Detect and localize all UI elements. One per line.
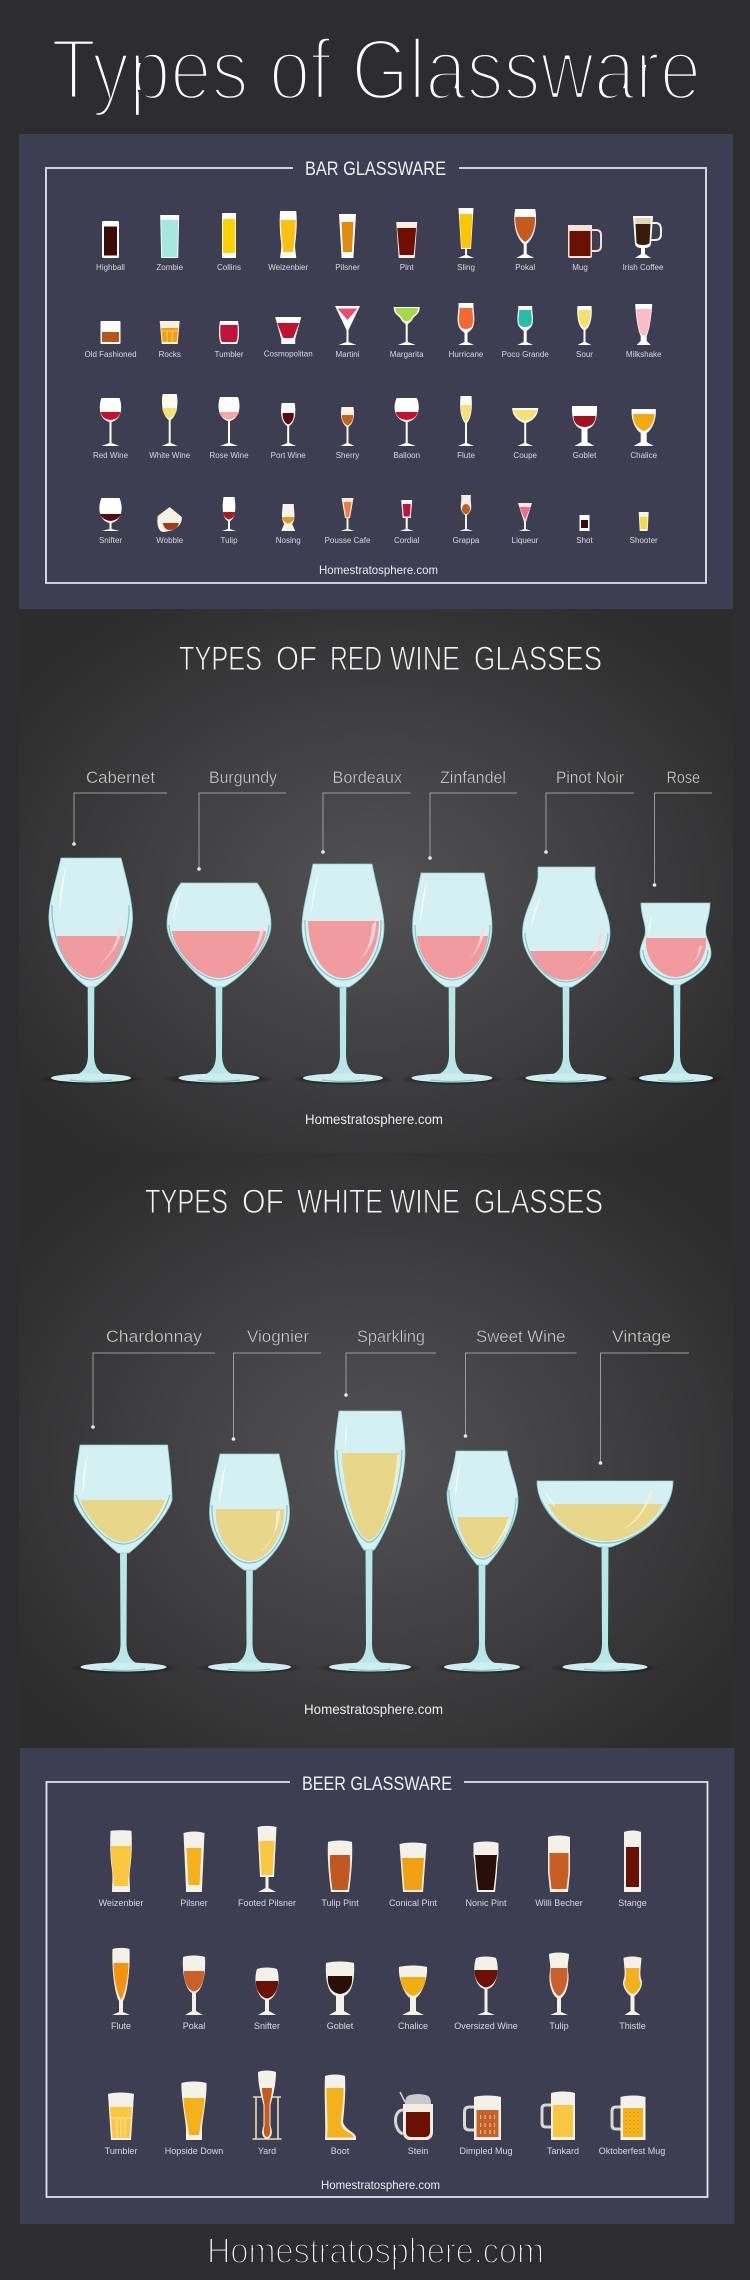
beer: Boot [325, 2074, 356, 2156]
beer: Willi Becher [535, 1836, 583, 1908]
callout: Viognier [232, 1327, 321, 1441]
glass: Port Wine [271, 403, 306, 460]
glass: Mug: Mug [572, 263, 588, 272]
wine glass: Burgundy [163, 883, 275, 1085]
wine glass: Bordeaux [291, 864, 395, 1085]
wine glass: Chardonnay [68, 1445, 180, 1674]
glass: Margarita [390, 307, 424, 359]
callout: Sparkling [344, 1327, 436, 1397]
beer: Stein: Stein [408, 2146, 428, 2156]
glass: Chalice [630, 409, 658, 460]
glass: White Wine: White Wine [149, 451, 191, 460]
panel: red wine glasses [19, 609, 733, 1153]
glass: Rocks: Rocks [159, 350, 181, 359]
heading: types of white wine glasses: TYPES [145, 1183, 228, 1221]
glass: Coupe [512, 408, 538, 460]
wine glass: Sweet Wine [432, 1451, 532, 1674]
glass: Rose Wine [209, 397, 249, 460]
heading: types of red wine glasses: GLASSES [474, 640, 602, 678]
beer: Conical Pint: Conical Pint [389, 1898, 438, 1908]
callout: Zinfandel [428, 768, 517, 860]
glass: Nosing [276, 504, 301, 545]
callout: Burgundy [197, 768, 286, 871]
beer: Dimpled Mug [459, 2096, 513, 2156]
footer site name: Homestratosphere.com [207, 2230, 544, 2271]
callout: Cabernet [72, 768, 167, 846]
glass: Milkshake [626, 304, 662, 359]
beer: Weizenbier [99, 1830, 143, 1908]
glass: Old Fashioned: Old Fashioned [84, 350, 137, 359]
beer: Conical Pint [389, 1842, 438, 1908]
beer: Pilsner: Pilsner [180, 1898, 208, 1908]
heading: types of red wine glasses: TYPES [179, 640, 262, 678]
source credit: beer: Homestratosphere.com [321, 2178, 440, 2192]
callout: Cabernet: Cabernet [86, 768, 155, 787]
callout: Zinfandel: Zinfandel [440, 768, 506, 787]
glass: Sling: Sling [457, 263, 475, 272]
glass: Goblet [572, 406, 597, 460]
beer: Tulip [549, 1952, 569, 2031]
beer: Tankard: Tankard [547, 2146, 579, 2156]
beer: Chalice [398, 1966, 428, 2031]
glass: Shot [576, 515, 594, 545]
beer: Nonic Pint: Nonic Pint [465, 1898, 507, 1908]
beer: Yard: Yard [258, 2146, 276, 2156]
source credit: red wine: Homestratosphere.com [305, 1111, 443, 1127]
wine glass: Vintage [537, 1481, 673, 1674]
wine glass: Cabernet [39, 858, 143, 1085]
wine glass: Rose [626, 903, 726, 1085]
glass: Pousse Cafe: Pousse Cafe [325, 536, 371, 545]
source credit: bar: Homestratosphere.com [319, 563, 438, 577]
glass: Cosmopolitan [264, 317, 313, 358]
beer: Oversized Wine [454, 1956, 518, 2031]
beer: Tulip Pint [321, 1840, 359, 1908]
glass: Pokal: Pokal [515, 263, 535, 272]
glass: Tumbler (bar) [214, 321, 244, 359]
callout: Bordeaux [321, 768, 410, 854]
callout: Vintage: Vintage [612, 1327, 671, 1346]
callout: Pinot Noir: Pinot Noir [556, 768, 624, 787]
glass: Pousse Cafe [325, 498, 371, 545]
glass: Flute: Flute [457, 451, 475, 460]
beer: Yard [252, 2070, 282, 2156]
beer: Tulip Pint: Tulip Pint [321, 1898, 359, 1908]
heading: types of red wine glasses: WINE [390, 640, 460, 678]
callout: Burgundy: Burgundy [209, 768, 277, 787]
glass: Pilsner: Pilsner [335, 263, 360, 272]
beer: Tumbler [105, 2092, 137, 2156]
glass: Highball [96, 221, 125, 272]
callout: Rose: Rose [666, 768, 700, 787]
glass: Rocks [159, 321, 181, 359]
beer: Tulip: Tulip [549, 2021, 569, 2031]
glass: Shooter: Shooter [630, 536, 658, 545]
source credit: white wine: Homestratosphere.com [304, 1701, 443, 1717]
glass: Snifter: Snifter [99, 536, 122, 545]
glass: Grappa: Grappa [453, 536, 480, 545]
beer: Flute: Flute [111, 2021, 131, 2031]
glass: Grappa [453, 495, 480, 545]
heading: bar glassware: BAR GLASSWARE [305, 159, 446, 180]
heading: types of white wine glasses: WHITE [297, 1183, 383, 1221]
glass: Balloon: Balloon [393, 451, 420, 460]
beer: Willi Becher: Willi Becher [535, 1898, 583, 1908]
beer: Flute [111, 1948, 131, 2031]
beer: Weizenbier: Weizenbier [99, 1898, 143, 1908]
beer: Footed Pilsner: Footed Pilsner [238, 1898, 296, 1908]
panel: beer glassware [20, 1748, 734, 2224]
heading: types of white wine glasses: WINE [390, 1183, 460, 1221]
beer: Tankard [542, 2092, 579, 2156]
heading: types of white wine glasses [145, 1183, 603, 1221]
wine glass: Zinfandel [400, 873, 504, 1085]
glass: Sour: Sour [576, 350, 593, 359]
beer: Snifter: Snifter [254, 2021, 280, 2031]
glass: Flute [457, 396, 475, 460]
glass: Snifter [99, 498, 122, 545]
glass: Pilsner [335, 214, 360, 272]
glass: Sling [457, 208, 475, 272]
glass: Hurricane: Hurricane [449, 350, 484, 359]
glass: Tulip (bar): Tulip [220, 536, 238, 545]
beer: Thistle: Thistle [619, 2021, 646, 2031]
callout: Rose [653, 768, 712, 887]
heading: types of white wine glasses: GLASSES [474, 1183, 603, 1221]
glass: Weizenbier: Weizenbier [268, 263, 308, 272]
beer: Snifter [254, 1968, 280, 2031]
glass: Collins [217, 213, 241, 272]
heading: types of red wine glasses: RED [330, 640, 382, 678]
beer: Pokal: Pokal [183, 2021, 205, 2031]
heading: types of white wine glasses: OF [242, 1183, 284, 1221]
glass: Nosing: Nosing [276, 536, 301, 545]
callout: Vintage [599, 1327, 689, 1465]
callout: Chardonnay [91, 1327, 215, 1429]
glass: Irish Coffee: Irish Coffee [623, 263, 664, 272]
beer: Tumbler: Tumbler [105, 2146, 137, 2156]
callout: Bordeaux: Bordeaux [332, 768, 402, 787]
beer: Chalice: Chalice [398, 2021, 428, 2031]
wine glass: Viognier [196, 1454, 304, 1674]
glass: Pint [396, 222, 417, 272]
glass: Martini: Martini [335, 350, 360, 359]
glass: Cosmopolitan: Cosmopolitan [264, 350, 313, 358]
glass: Cordial [394, 500, 420, 545]
glass: Red Wine: Red Wine [93, 451, 129, 460]
glass: Balloon [393, 398, 420, 460]
beer: Pokal [183, 1956, 205, 2031]
glass: Old Fashioned [84, 321, 137, 359]
glass: Tumbler (bar): Tumbler [214, 350, 244, 359]
wine glass: Pinot Noir [514, 867, 618, 1085]
glass: Zombie [156, 215, 184, 272]
glass: Weizenbier [268, 211, 308, 272]
callout: Sparkling: Sparkling [357, 1327, 425, 1346]
glass: Coupe: Coupe [513, 451, 538, 460]
glass: Pokal [514, 209, 536, 272]
glass: Chalice: Chalice [630, 451, 658, 460]
heading: types of red wine glasses: OF [276, 640, 317, 678]
beer: Oktoberfest Mug [599, 2096, 665, 2156]
glass: Martini [335, 306, 360, 359]
beer: Stein [396, 2092, 433, 2156]
beer: Thistle [619, 1956, 646, 2031]
glass: Milkshake: Milkshake [626, 350, 662, 359]
beer: Goblet [326, 1962, 354, 2031]
beer: Boot: Boot [331, 2146, 350, 2156]
wine glass: Sparkling [315, 1411, 423, 1674]
beer: Pilsner [180, 1832, 208, 1908]
callout: Chardonnay: Chardonnay [106, 1327, 203, 1346]
glass: Collins: Collins [217, 263, 241, 272]
glass: Margarita: Margarita [390, 350, 424, 359]
glass: Wobble: Wobble [156, 536, 184, 545]
glass: Hurricane [449, 303, 484, 359]
beer: Hopside Down [165, 2082, 223, 2156]
glass: Red Wine [93, 398, 129, 460]
heading: beer glassware: BEER GLASSWARE [302, 1774, 452, 1795]
glass: White Wine [149, 394, 191, 460]
beer: Hopside Down: Hopside Down [165, 2146, 223, 2156]
callout: Viognier: Viognier [247, 1327, 309, 1346]
beer: Dimpled Mug: Dimpled Mug [459, 2146, 513, 2156]
glass: Mug [568, 225, 601, 272]
glass: Sherry: Sherry [336, 451, 359, 460]
glass: Irish Coffee [623, 216, 664, 272]
glass: Tulip (bar) [220, 497, 238, 545]
callout: Sweet Wine [464, 1327, 576, 1438]
glass: Port Wine: Port Wine [271, 451, 306, 460]
glass: Shot: Shot [576, 536, 594, 545]
panel: bar glassware [19, 134, 733, 609]
glass: Poco Grande [502, 306, 549, 359]
beer: Stange [618, 1830, 647, 1908]
callout: Pinot Noir [544, 768, 634, 854]
glass: Sour [576, 306, 593, 359]
glass: Poco Grande: Poco Grande [502, 350, 549, 359]
callout: Sweet Wine: Sweet Wine [476, 1327, 566, 1346]
glass: Shooter [630, 512, 658, 545]
glass: Zombie: Zombie [156, 263, 184, 272]
glass: Sherry [336, 407, 359, 460]
glass: Highball: Highball [96, 263, 125, 272]
beer: Nonic Pint [465, 1842, 507, 1908]
panel: white wine glasses [19, 1153, 733, 1748]
glass: Goblet: Goblet [573, 451, 597, 460]
glass: Pint: Pint [400, 263, 414, 272]
beer: Goblet: Goblet [327, 2021, 354, 2031]
glass: Liqueur: Liqueur [512, 536, 539, 545]
glass: Rose Wine: Rose Wine [209, 451, 249, 460]
beer: Stange: Stange [618, 1898, 647, 1908]
glass: Cordial: Cordial [394, 536, 420, 545]
glass: Liqueur [512, 503, 539, 545]
heading: types of red wine glasses [179, 640, 602, 678]
beer: Oktoberfest Mug: Oktoberfest Mug [599, 2146, 665, 2156]
glass: Wobble [156, 507, 184, 545]
beer: Footed Pilsner [238, 1826, 296, 1908]
beer: Oversized Wine: Oversized Wine [454, 2021, 518, 2031]
